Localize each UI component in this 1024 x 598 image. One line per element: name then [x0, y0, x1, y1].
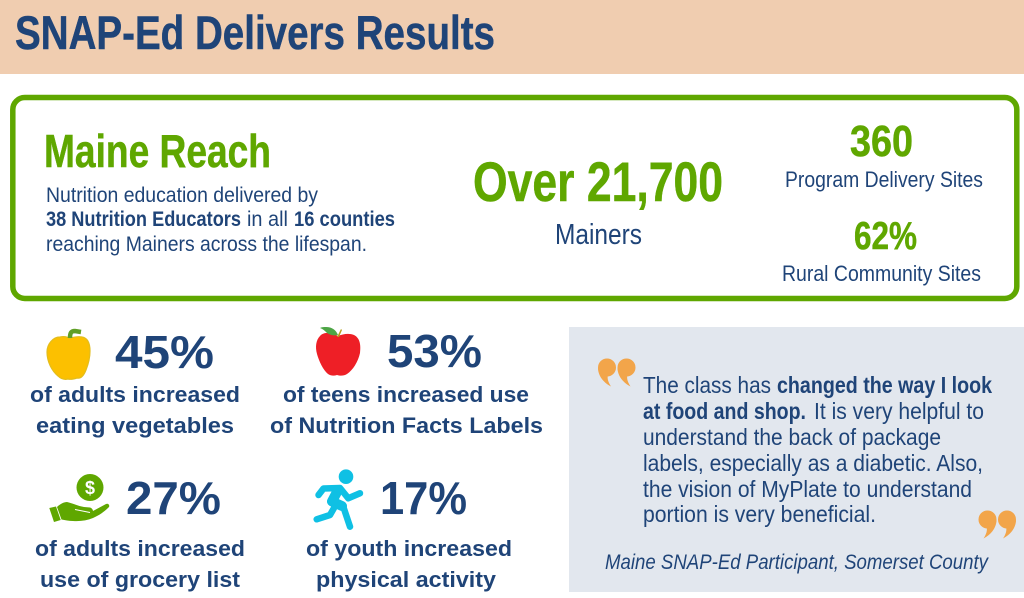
text block: reach description: Nutrition education delivered by — [46, 184, 318, 207]
stat: 45% adults vegetables — [30, 326, 240, 438]
stat: 62% rural community sites — [782, 215, 981, 286]
icon: hand with dollar coin — [49, 474, 109, 522]
stat: 360 program delivery sites — [785, 117, 983, 192]
stat: 53% teens labels: of Nutrition Facts Labels — [270, 413, 543, 438]
stat: 45% adults vegetables: eating vegetables — [36, 413, 234, 438]
stat: over 21,700 Mainers: Over 21,700 — [473, 150, 723, 213]
stat: 53% teens labels: of teens increased use — [283, 382, 529, 407]
panel: participant quote — [569, 327, 1024, 592]
text block: reach description: 16 counties — [294, 208, 395, 231]
icon: opening quote mark — [598, 358, 636, 386]
title: SNAP-Ed Delivers Results — [15, 6, 495, 59]
attribution: Maine SNAP-Ed Participant, Somerset County — [605, 551, 989, 574]
panel: Maine Reach — [13, 98, 1017, 298]
text block: quote: changed the way I look — [777, 372, 992, 398]
stat: 360 program delivery sites: Program Delivery Sites — [785, 167, 983, 192]
text block: quote: understand the back of package — [643, 424, 941, 450]
stat: 17% youth activity: 17% — [380, 472, 467, 524]
text block: quote: at food and shop. — [643, 398, 806, 424]
heading: Maine Reach: Maine Reach — [44, 125, 271, 177]
text block: quote: the vision of MyPlate to understand — [643, 476, 972, 502]
stat: 45% adults vegetables: 45% — [115, 326, 214, 378]
stat: 17% youth activity: physical activity — [316, 567, 497, 592]
stat: 27% adults grocery list: 27% — [126, 472, 221, 524]
stat: over 21,700 Mainers — [473, 150, 723, 251]
text block: reach description: reaching Mainers across the lifespan. — [46, 233, 367, 256]
stat: 17% youth activity: of youth increased — [306, 536, 512, 561]
stat: 27% adults grocery list: use of grocery list — [40, 567, 241, 592]
icon: yellow pepper — [47, 331, 90, 379]
stat: over 21,700 Mainers: Mainers — [555, 219, 642, 251]
text block: quote: portion is very beneficial. — [643, 501, 876, 527]
text block: reach description: in all — [247, 208, 288, 231]
stat: 53% teens labels — [270, 325, 543, 438]
icon: hand with dollar coin: $ — [85, 478, 95, 498]
text block: quote: The class has — [643, 372, 771, 398]
text block: reach description: 38 Nutrition Educators — [46, 208, 241, 231]
text block: quote — [643, 372, 992, 527]
header band — [0, 0, 1024, 74]
stat: 62% rural community sites: 62% — [854, 215, 917, 258]
icon: running figure — [317, 469, 360, 527]
stat: 27% adults grocery list: of adults increased — [35, 536, 245, 561]
icon: red apple — [316, 327, 360, 376]
icon: closing quote mark — [978, 510, 1016, 538]
text block: quote: labels, especially as a diabetic. Also, — [643, 450, 983, 476]
stat: 17% youth activity — [306, 469, 512, 592]
stat: 360 program delivery sites: 360 — [850, 117, 913, 166]
stat: 27% adults grocery list — [35, 472, 245, 592]
text block: reach description — [46, 184, 395, 256]
text block: quote: It is very helpful to — [814, 398, 984, 424]
stat: 45% adults vegetables: of adults increased — [30, 382, 240, 407]
stat: 62% rural community sites: Rural Community Sites — [782, 261, 981, 286]
stat: 53% teens labels: 53% — [387, 325, 482, 377]
